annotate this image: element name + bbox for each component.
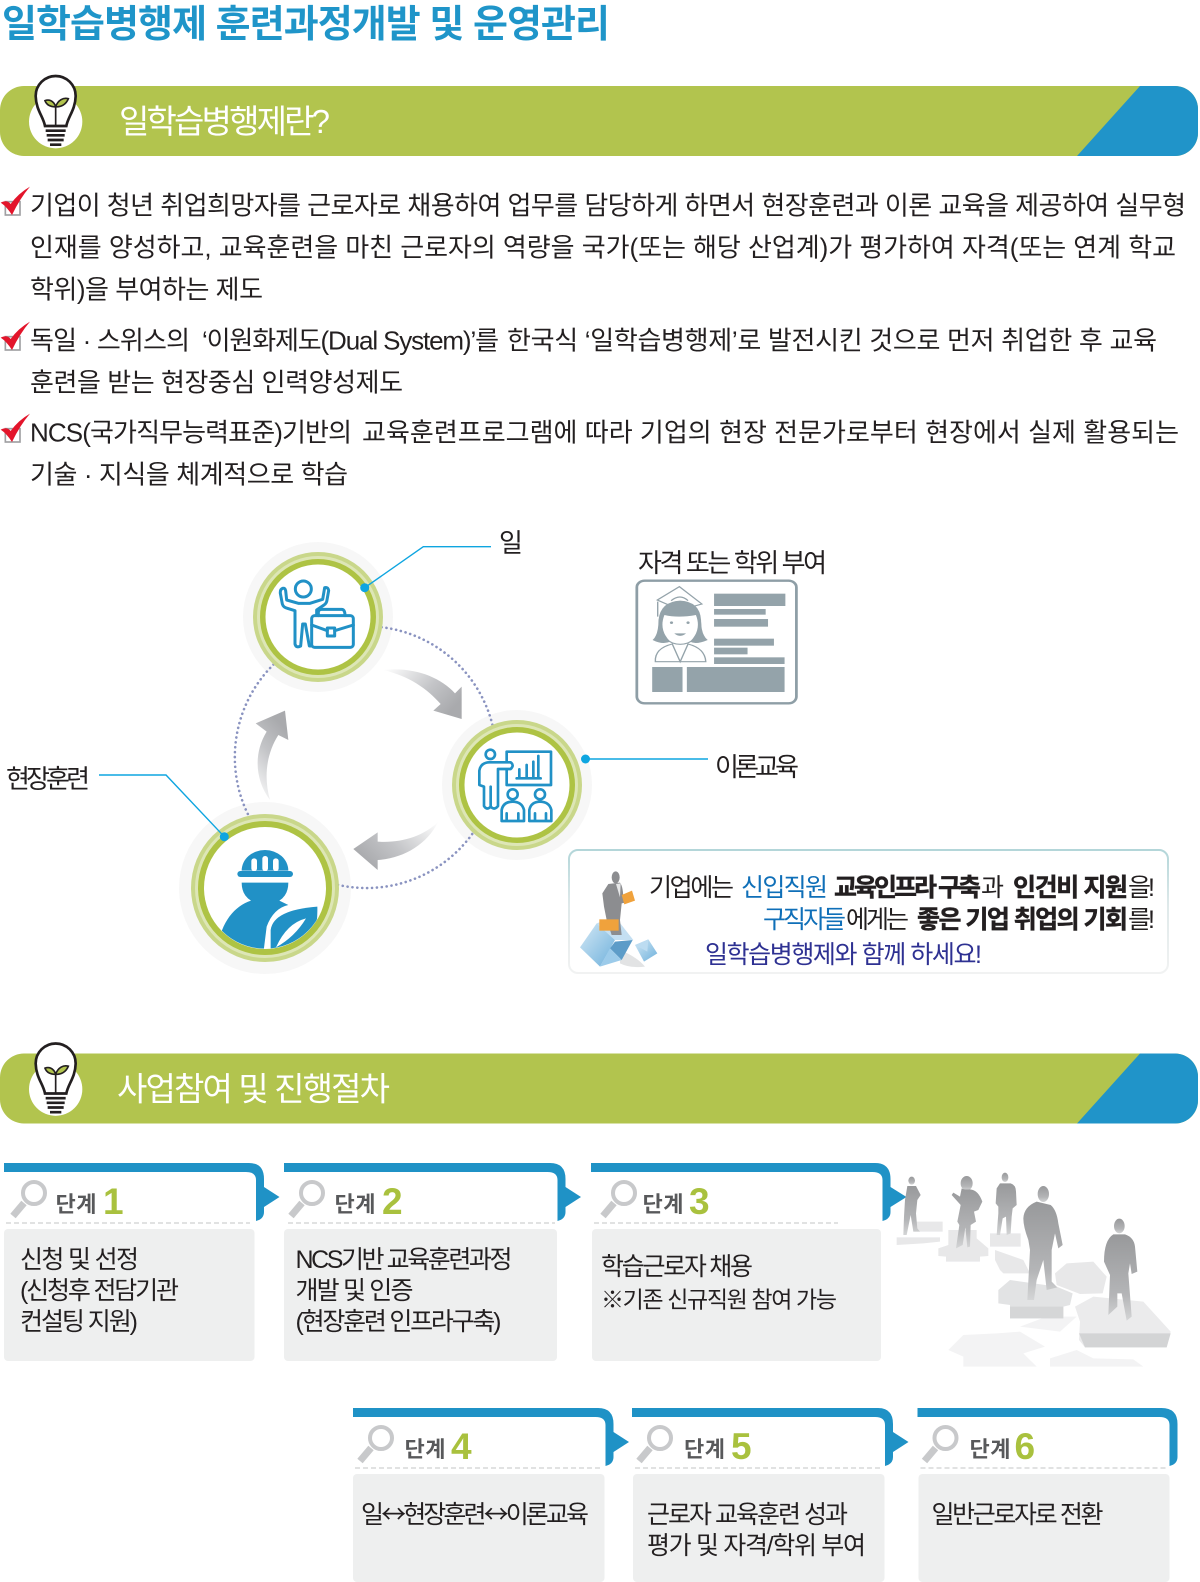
- illustration: businessman on cubes: [580, 871, 657, 967]
- step label: [684, 1426, 752, 1467]
- halos: [179, 542, 592, 974]
- callout text: 에게는: [846, 906, 909, 934]
- step text: 개발 및 인증: [296, 1277, 414, 1305]
- arrow: theory to training: [353, 822, 438, 870]
- arrows in zoom coordinates: [256, 669, 462, 870]
- dotted cycle ring: [235, 627, 493, 888]
- callout text: 과: [981, 874, 1004, 902]
- callout text: 좋은 기업 취업의 기회: [917, 906, 1128, 934]
- step label: [970, 1426, 1035, 1467]
- text: dual system: 훈련을 받는 현장중심 인력양성제도: [30, 368, 403, 398]
- step label: 5: [731, 1426, 752, 1467]
- text: NCS: 교육훈련프로그램에 따라 기업의 현장 전문가로부터 현장에서 실제 활용되는: [362, 418, 1179, 448]
- step 6: [918, 1408, 1178, 1582]
- step text: [647, 1501, 866, 1560]
- step label: [56, 1181, 124, 1222]
- icon: ID card: [637, 581, 796, 703]
- node: theory: [452, 720, 582, 850]
- icon: magnifier: [924, 1427, 956, 1461]
- node: on-site training: [191, 814, 339, 962]
- bullet 1: [1, 187, 1186, 304]
- step text: NCS기반 교육훈련과정: [296, 1246, 512, 1274]
- step text: 일↔현장훈련↔이론교육: [361, 1495, 589, 1531]
- label: 이론교육: 이론교육: [715, 752, 799, 782]
- step text: [20, 1246, 179, 1336]
- diagram: work-training-theory cycle: [6, 528, 799, 974]
- step label: 3: [689, 1181, 710, 1222]
- icon: red check: [1, 187, 30, 215]
- step label: 단계: [56, 1192, 96, 1217]
- callout text: 구직자들: [763, 906, 846, 934]
- callout line: work: [360, 528, 523, 592]
- text: dual system: [30, 326, 1157, 398]
- step label: [334, 1181, 403, 1222]
- text: definition: 인재를 양성하고, 교육훈련을 마친 근로자의 역량을 국가(또는 해당 산업계)가 평가하여 자격(또는 연계 학교: [30, 232, 1176, 262]
- step text: 학습근로자 채용: [601, 1253, 753, 1281]
- step label: [642, 1181, 710, 1222]
- icon: magnifier: [291, 1182, 323, 1216]
- step text: 컨설팅 지원): [20, 1308, 138, 1336]
- label: 현장훈련: 현장훈련: [6, 764, 90, 794]
- step label: 2: [382, 1181, 403, 1222]
- text: definition: [30, 190, 1186, 304]
- step 2: [284, 1163, 581, 1361]
- text: NCS: NCS(국가직무능력표준)기반의: [30, 418, 352, 448]
- text: dual system: 독일 · 스위스의: [30, 326, 190, 356]
- step label: 1: [103, 1181, 124, 1222]
- text: NCS: 기술 · 지식을 체계적으로 학습: [30, 460, 348, 490]
- label: 자격 또는 학위 부여: 자격 또는 학위 부여: [638, 548, 827, 578]
- floor puzzle shadows: [948, 1317, 1143, 1367]
- icon: magnifier: [639, 1427, 671, 1461]
- bullet 2: [1, 322, 1157, 398]
- text: dual system: ‘이원화제도(Dual System)’를: [202, 326, 499, 356]
- icon: worker with leaf: [217, 850, 317, 953]
- step 4: [353, 1408, 629, 1582]
- callout text: 를!: [1128, 906, 1155, 934]
- step text: [601, 1253, 837, 1312]
- illustration: business people on puzzle pieces: [897, 1173, 1171, 1367]
- step label: 단계: [684, 1437, 725, 1462]
- step label: 단계: [404, 1437, 446, 1462]
- banner: 일학습병행제란?: [0, 86, 1198, 156]
- silhouettes: [903, 1173, 1137, 1321]
- puzzle pieces: [897, 1222, 1107, 1294]
- step label: 단계: [334, 1192, 376, 1217]
- step 5: [632, 1408, 908, 1582]
- callout line: theory: [581, 752, 799, 782]
- icon: red check: [1, 414, 30, 442]
- callout text: 일학습병행제와 함께 하세요!: [705, 941, 982, 969]
- banner heading: 일학습병행제란?: [119, 103, 330, 140]
- step text: (신청후 전담기관: [20, 1277, 179, 1305]
- arrow: work to theory: [383, 669, 462, 719]
- banner: 사업참여 및 진행절차: [0, 1054, 1198, 1124]
- text: NCS: [30, 418, 1179, 490]
- text: dual system: 한국식 ‘일학습병행제’로 발전시킨 것으로 먼저 취업한 후 교육: [507, 326, 1157, 356]
- step text: (현장훈련 인프라구축): [296, 1308, 502, 1336]
- arrow: training to work: [256, 711, 288, 800]
- title: 일학습병행제 훈련과정개발 및 운영관리: [2, 4, 610, 46]
- label: 일: 일: [499, 528, 523, 558]
- step label: 4: [451, 1426, 472, 1467]
- step text: 신청 및 선정: [20, 1246, 139, 1274]
- callout line: training: [6, 764, 229, 841]
- icon: magnifier: [13, 1182, 45, 1216]
- callout panel: [569, 850, 1168, 973]
- callout text: 신입직원: [741, 874, 828, 902]
- callout text: 인건비 지원: [1013, 874, 1128, 902]
- icon: magnifier: [360, 1427, 392, 1461]
- callout text: 기업에는: [649, 874, 734, 902]
- certificate card: [637, 548, 827, 703]
- icon: red check: [1, 322, 30, 350]
- step text: [296, 1246, 512, 1336]
- icon: light bulb: [29, 76, 82, 148]
- icon: magnifier: [603, 1182, 635, 1216]
- step text: ※기존 신규직원 참여 가능: [601, 1286, 837, 1312]
- banner heading: 사업참여 및 진행절차: [117, 1070, 390, 1108]
- bullet 3: [1, 414, 1179, 490]
- text: definition: 기업이 청년 취업희망자를 근로자로 채용하여 업무를 담당하게 하면서 현장훈련과 이론 교육을 제공하여 실무형: [30, 190, 1186, 220]
- callout text: 을!: [1128, 874, 1155, 902]
- step 1: [4, 1163, 280, 1361]
- icon: teacher and students: [479, 750, 551, 821]
- callout text: [649, 874, 1155, 969]
- callout text: 교육인프라 구축: [834, 874, 981, 902]
- step label: 6: [1014, 1426, 1035, 1467]
- step text: 평가 및 자격/학위 부여: [647, 1532, 866, 1560]
- step label: 단계: [970, 1437, 1010, 1462]
- step text: 근로자 교육훈련 성과: [647, 1501, 848, 1529]
- node: work: [253, 552, 383, 682]
- icon: person with briefcase: [280, 581, 353, 647]
- text: definition: 학위)을 부여하는 제도: [30, 274, 263, 304]
- step 3: [591, 1163, 906, 1361]
- step label: 단계: [642, 1192, 684, 1217]
- step label: [404, 1426, 472, 1467]
- step text: 일반근로자로 전환: [932, 1501, 1104, 1529]
- icon: light bulb: [29, 1043, 82, 1116]
